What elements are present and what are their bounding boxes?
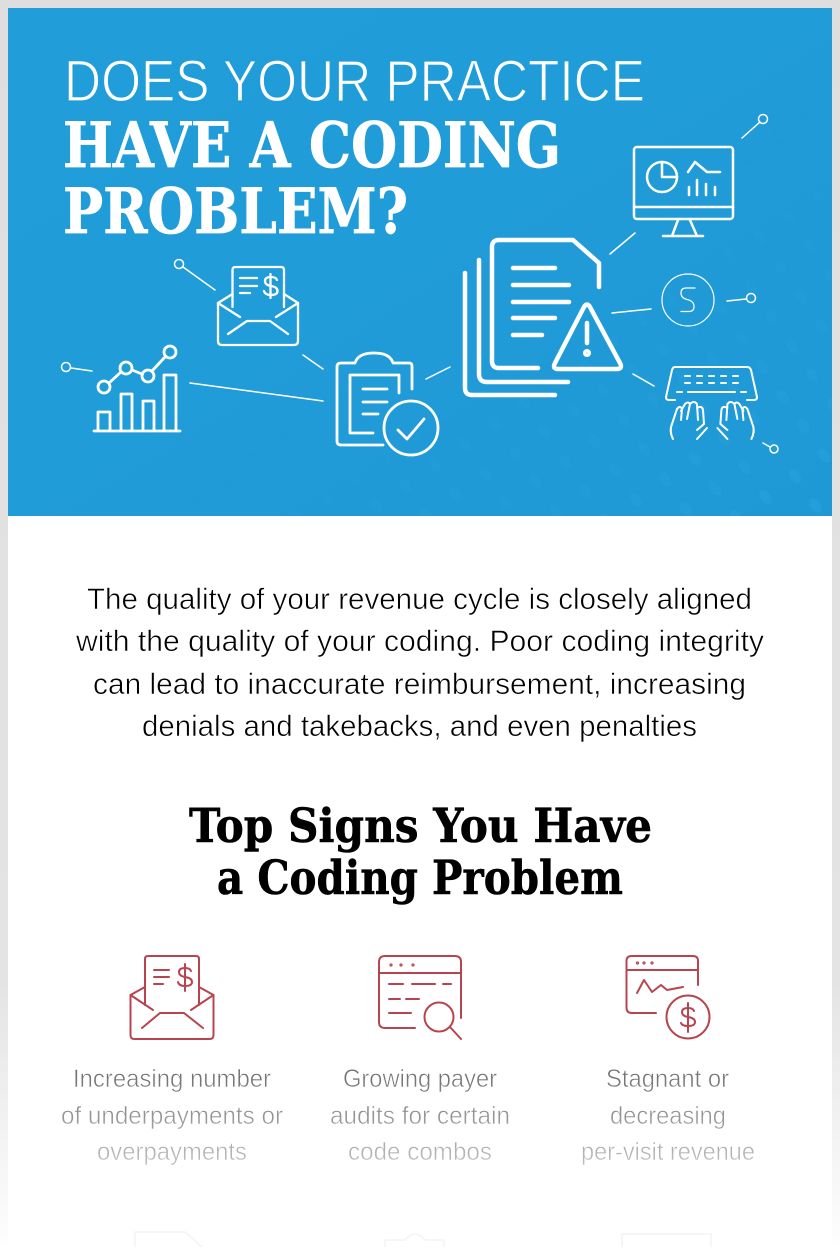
caption: payer audits: audits for certain <box>330 1102 510 1130</box>
icon: clipboard with check <box>337 353 438 455</box>
connector: envelope <box>174 260 323 369</box>
connector: document to monitor <box>610 233 635 254</box>
title: PROBLEM? <box>63 174 408 248</box>
section heading: a Coding Problem <box>217 851 623 906</box>
section heading <box>189 799 652 906</box>
icon: documents with warning <box>465 240 621 395</box>
section heading: Top Signs You Have <box>189 799 652 854</box>
caption: payer audits: code combos <box>348 1138 492 1166</box>
title: DOES YOUR PRACTICE <box>64 49 645 114</box>
intro paragraph <box>75 583 764 743</box>
connector: clipboard to document <box>426 367 450 379</box>
icon: dollar coin <box>662 274 714 326</box>
caption: underpayments: of underpayments or <box>61 1102 283 1130</box>
icon: red envelope <box>130 956 214 1039</box>
connector: monitor <box>742 114 768 138</box>
caption: per-visit revenue: decreasing <box>610 1102 726 1130</box>
fade overlay <box>8 1060 832 1230</box>
title <box>63 49 645 248</box>
caption: per-visit revenue <box>581 1065 755 1166</box>
caption: underpayments: overpayments <box>97 1138 247 1166</box>
connector: coin <box>612 294 756 313</box>
connector: keyboard <box>633 374 778 453</box>
caption: underpayments <box>61 1065 283 1166</box>
connector: chart <box>62 362 323 401</box>
white content panel <box>8 516 832 1260</box>
intro paragraph: The quality of your revenue cycle is closely aligned <box>87 583 752 616</box>
icon: keyboard and hands <box>666 367 757 439</box>
caption: payer audits: Growing payer <box>343 1065 497 1093</box>
caption: per-visit revenue: Stagnant or <box>606 1065 729 1093</box>
intro paragraph: can lead to inaccurate reimbursement, increasing <box>93 668 746 701</box>
icon: bar and line chart <box>94 346 180 431</box>
faded next-row icons <box>135 1232 711 1247</box>
intro paragraph: with the quality of your coding. Poor coding integrity <box>75 625 764 658</box>
hero banner <box>8 8 832 516</box>
bottom white edge <box>0 1247 840 1260</box>
title: HAVE A CODING <box>63 108 561 182</box>
icon: red revenue window <box>626 956 710 1038</box>
icon: envelope with invoice <box>218 267 298 345</box>
icon: red audit window <box>379 956 461 1039</box>
icon: monitor dashboard <box>634 147 733 236</box>
caption: underpayments: Increasing number <box>73 1065 271 1093</box>
caption: payer audits <box>330 1065 510 1166</box>
intro paragraph: denials and takebacks, and even penalties <box>142 710 697 743</box>
caption: per-visit revenue: per-visit revenue <box>581 1138 755 1166</box>
